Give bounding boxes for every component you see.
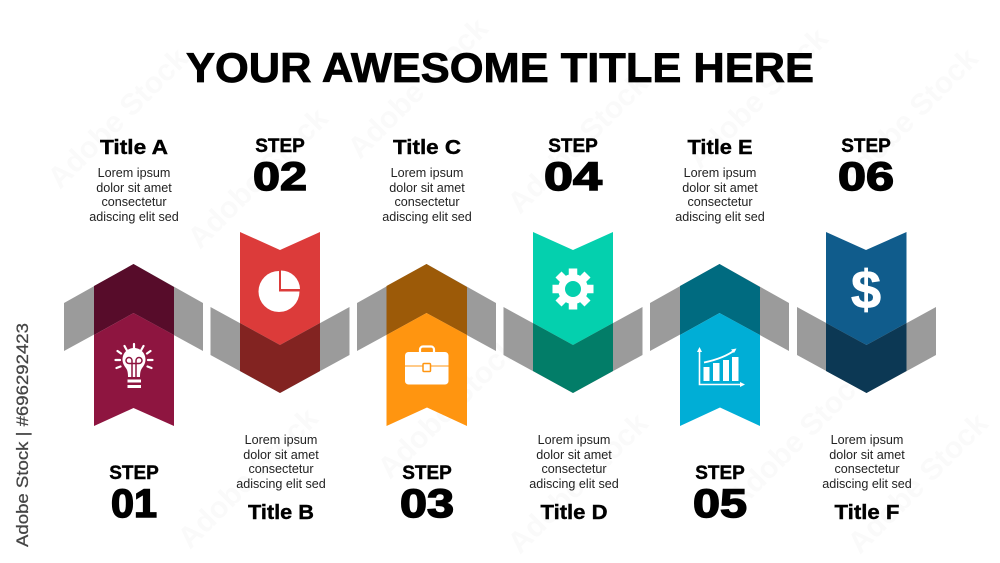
- chevron band 4: [504, 307, 642, 393]
- label: step 05 number: [693, 463, 747, 526]
- icon: gear: [552, 268, 594, 310]
- ribbon overlap 1: [94, 264, 174, 335]
- label: Title C: adiscing elit sed: [382, 210, 472, 224]
- label: Title B: adiscing elit sed: [236, 477, 326, 491]
- text: Adobe Stock: [502, 407, 655, 560]
- chevron band 3: [357, 264, 496, 351]
- label: Title F: adiscing elit sed: [822, 477, 912, 491]
- ribbon 5: [680, 313, 760, 426]
- label: Title B: [236, 433, 326, 524]
- label: Title B: consectetur: [248, 462, 314, 476]
- chevron band 1: [64, 264, 203, 351]
- label: Title D: consectetur: [541, 462, 607, 476]
- label: Title A: dolor sit amet: [96, 181, 172, 195]
- ribbon overlap 2: [240, 323, 320, 393]
- ribbon overlap 3: [386, 264, 467, 335]
- panel: step 02: [210, 232, 350, 393]
- label: Title A: Title A: [100, 136, 168, 159]
- label: step 02 number: 02: [253, 155, 307, 199]
- text: Adobe Stock: [172, 402, 325, 555]
- label: Title F: consectetur: [834, 462, 900, 476]
- label: Title F: Lorem ipsum: [831, 433, 903, 447]
- panel: step 05: [650, 264, 789, 426]
- text: Adobe Stock: [722, 362, 875, 515]
- label: step 02 number: STEP: [255, 136, 305, 157]
- label: Title D: Title D: [540, 501, 608, 524]
- label: Title A: Lorem ipsum: [98, 166, 170, 180]
- label: Title D: dolor sit amet: [536, 448, 612, 462]
- label: step 05 number: STEP: [695, 463, 745, 484]
- text: Adobe Stock: [832, 42, 985, 195]
- label: Title F: Title F: [834, 501, 900, 524]
- ribbon 3: [386, 313, 467, 426]
- panel: step 04: [504, 232, 642, 393]
- label: Title E: Title E: [688, 136, 752, 159]
- label: step 01 number: [109, 463, 159, 526]
- panel: step 01: [64, 264, 203, 426]
- label: step 01 number: STEP: [109, 463, 159, 484]
- ribbon overlap 6: [826, 323, 906, 393]
- label: Title C: [382, 136, 472, 224]
- label: Title C: consectetur: [394, 195, 460, 209]
- label: step 04 number: [544, 136, 603, 199]
- title: YOUR AWESOME TITLE HERE: [186, 44, 814, 91]
- label: Title A: [89, 136, 179, 224]
- label: Title A: adiscing elit sed: [89, 210, 179, 224]
- label: Title E: Lorem ipsum: [684, 166, 756, 180]
- ribbon 6: [826, 232, 906, 345]
- label: step 03 number: 03: [400, 482, 454, 526]
- panel: step 06: [797, 232, 936, 393]
- icon: pie chart: [258, 270, 300, 312]
- label: step 06 number: [838, 136, 894, 199]
- text: Adobe Stock: [372, 332, 525, 485]
- label: Title B: dolor sit amet: [243, 448, 319, 462]
- icon: dollar sign: $: [851, 260, 881, 320]
- ribbon overlap 4: [533, 323, 613, 393]
- label: Title F: dolor sit amet: [829, 448, 905, 462]
- ribbon overlap 5: [680, 264, 760, 335]
- text: Adobe Stock: [42, 42, 195, 195]
- text: Adobe Stock: [342, 12, 495, 165]
- ribbon 4: [533, 232, 613, 345]
- label: step 04 number: 04: [544, 155, 603, 199]
- label: step 01 number: 01: [111, 482, 157, 526]
- chevron band 6: [797, 307, 936, 393]
- label: Title E: consectetur: [687, 195, 753, 209]
- ribbon 1: [94, 313, 174, 426]
- label: step 03 number: STEP: [402, 463, 452, 484]
- label: Title C: Title C: [393, 136, 461, 159]
- text: Adobe Stock: [682, 22, 835, 175]
- label: Title B: Title B: [248, 501, 314, 524]
- label: step 04 number: STEP: [548, 136, 598, 157]
- label: Title B: Lorem ipsum: [245, 433, 317, 447]
- label: Title C: Lorem ipsum: [391, 166, 463, 180]
- label: Title C: dolor sit amet: [389, 181, 465, 195]
- label: Title E: dolor sit amet: [682, 181, 758, 195]
- label: step 06 number: STEP: [841, 136, 891, 157]
- panel: step 03: [357, 264, 496, 426]
- label: Title E: [675, 136, 765, 224]
- label: Title D: adiscing elit sed: [529, 477, 619, 491]
- icon: light bulb: [116, 344, 152, 388]
- label: Title D: Lorem ipsum: [538, 433, 610, 447]
- label: step 03 number: [400, 463, 454, 526]
- chevron band 2: [210, 307, 350, 393]
- text: Adobe Stock: [842, 407, 995, 560]
- label: step 06 number: 06: [838, 155, 894, 199]
- label: step 05 number: 05: [693, 482, 747, 526]
- label: Title E: adiscing elit sed: [675, 210, 765, 224]
- icon: growth chart: [697, 347, 745, 387]
- side credit: Adobe Stock number: Adobe Stock | #696292423: [13, 323, 32, 547]
- label: step 02 number: [253, 136, 307, 199]
- text: Adobe Stock: [502, 67, 655, 220]
- icon: briefcase: [405, 346, 448, 384]
- chevron band 5: [650, 264, 789, 351]
- ribbon 2: [240, 232, 320, 345]
- text: Adobe Stock: [182, 102, 335, 255]
- label: Title A: consectetur: [101, 195, 167, 209]
- label: Title F: [822, 433, 912, 524]
- label: Title D: [529, 433, 619, 524]
